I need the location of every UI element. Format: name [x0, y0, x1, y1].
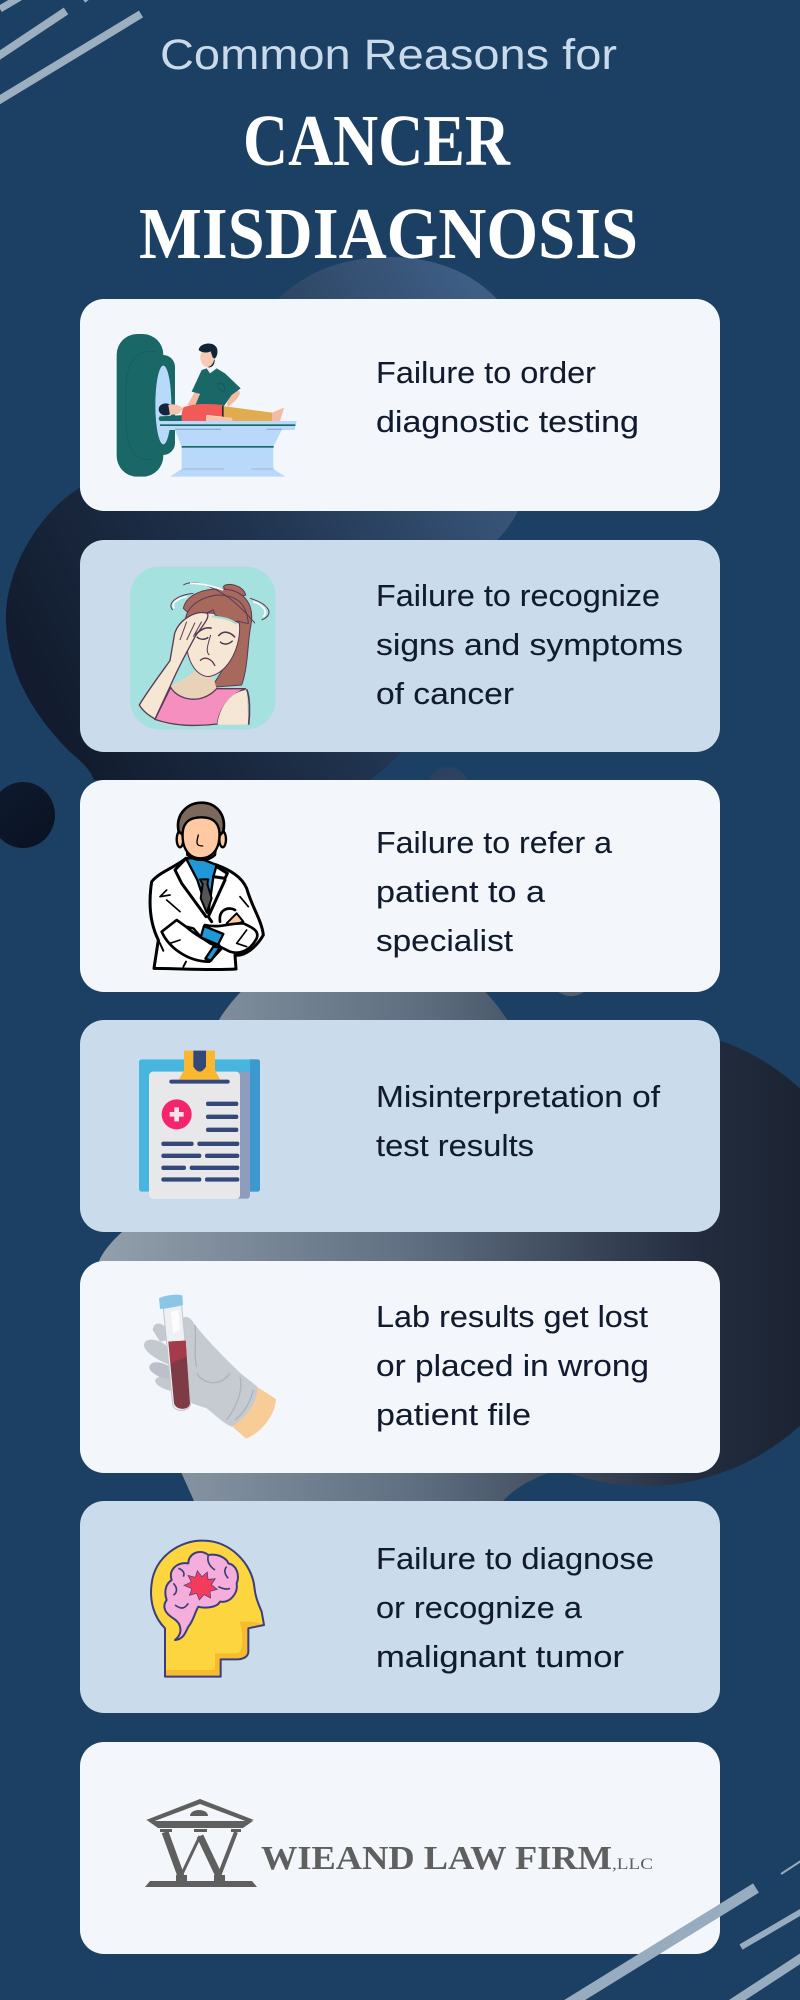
- decorative stripes top left: [0, 0, 141, 102]
- icon: MRI scanner with doctor and patient: [117, 334, 297, 477]
- text: misinterpretation: [376, 1079, 660, 1163]
- title line: CANCER: CANCER: [243, 100, 511, 181]
- text: misinterpretation: Misinterpretation of: [376, 1079, 660, 1114]
- panel: failure to order diagnostic testing: [80, 299, 720, 511]
- background blob: upper dark to light shape: [6, 257, 530, 780]
- text: failure to recognize signs: Failure to recognize: [376, 578, 660, 613]
- text: misinterpretation: test results: [376, 1128, 534, 1163]
- logo text: ,LLC: [612, 1856, 653, 1873]
- icon: temple logo: [145, 1799, 257, 1887]
- background right dark circle: [416, 1028, 800, 1486]
- icon: clipboard report: [139, 1051, 260, 1199]
- title line: Common Reasons for: Common Reasons for: [160, 31, 617, 79]
- logo text: WIEAND LAW FIRM: [261, 1840, 612, 1877]
- panel: misinterpretation: [80, 1020, 720, 1232]
- panel: failure to recognize signs: [80, 540, 720, 752]
- text: malignant tumor: malignant tumor: [376, 1639, 624, 1674]
- background capsule: [448, 789, 571, 974]
- panel: lab results lost: [80, 1261, 720, 1473]
- text: lab results lost: [376, 1299, 649, 1432]
- text: failure to recognize signs: of cancer: [376, 676, 514, 711]
- text: malignant tumor: or recognize a: [376, 1590, 583, 1625]
- text: failure to refer: Failure to refer a: [376, 825, 613, 860]
- icon: gloved hand holding blood tube: [144, 1295, 276, 1439]
- decorative stripes bottom right: [565, 1859, 800, 2000]
- text: lab results lost: or placed in wrong: [376, 1348, 649, 1383]
- text: malignant tumor: [376, 1541, 654, 1674]
- panel: malignant tumor: [80, 1501, 720, 1713]
- text: failure to recognize signs: [376, 578, 683, 711]
- background dark dot: [0, 782, 55, 848]
- title line: MISDIAGNOSIS: MISDIAGNOSIS: [139, 193, 638, 274]
- text: failure to refer: specialist: [376, 923, 513, 958]
- text: failure to recognize signs: signs and symptoms: [376, 627, 683, 662]
- text: failure to order diagnostic testing: Failure to order: [376, 355, 596, 390]
- panel: law firm logo: [80, 1742, 720, 1954]
- text: failure to refer: patient to a: [376, 874, 546, 909]
- text: failure to order diagnostic testing: diagnostic testing: [376, 404, 639, 439]
- text: lab results lost: Lab results get lost: [376, 1299, 648, 1334]
- background grey blob: [99, 940, 600, 1600]
- icon: doctor with crossed arms: [150, 803, 263, 970]
- text: malignant tumor: Failure to diagnose: [376, 1541, 654, 1576]
- panel: failure to refer: [80, 780, 720, 992]
- text: failure to order diagnostic testing: [376, 355, 639, 439]
- icon: dizzy woman: [130, 567, 276, 729]
- icon: head with brain tumor: [151, 1541, 264, 1677]
- text: lab results lost: patient file: [376, 1397, 531, 1432]
- text: failure to refer: [376, 825, 613, 958]
- title: [139, 31, 638, 274]
